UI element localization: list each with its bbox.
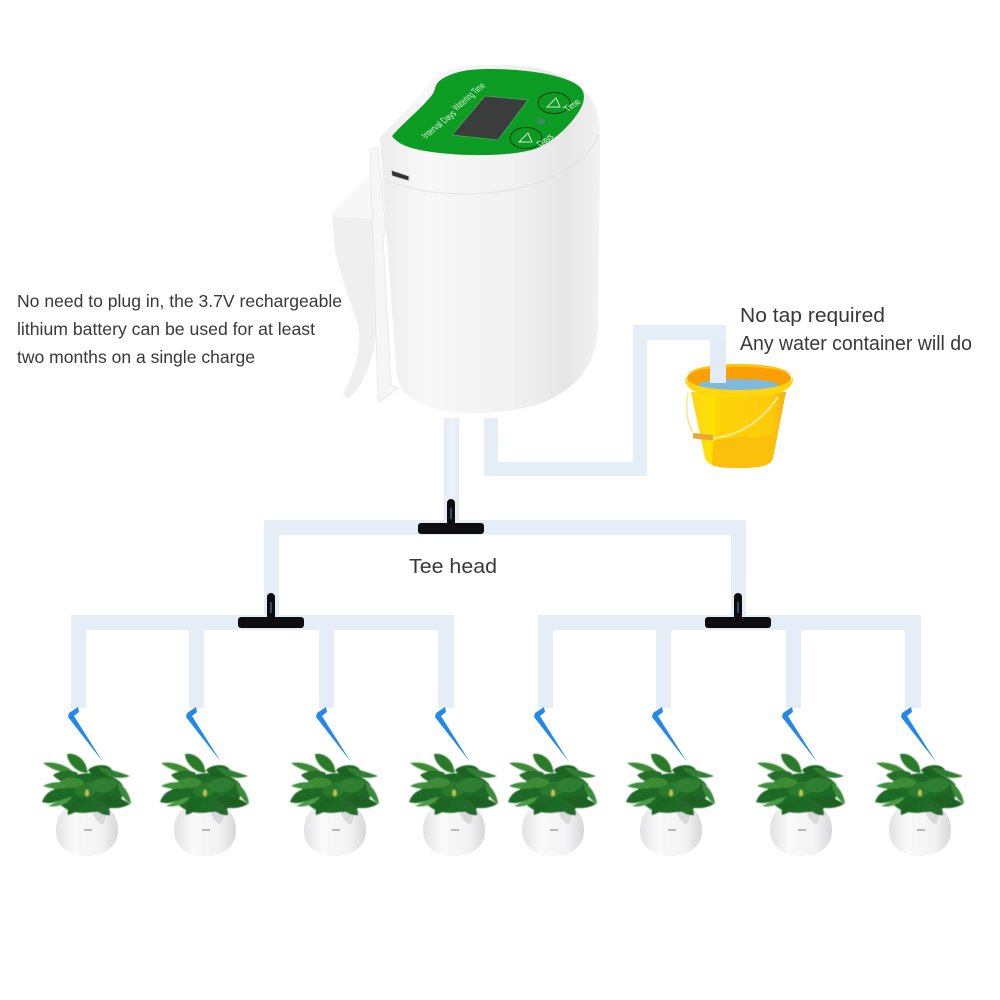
device body bbox=[380, 65, 600, 413]
dripper 1 bbox=[68, 707, 103, 762]
tee connector: main bbox=[418, 499, 484, 534]
potted plant 7 bbox=[756, 754, 845, 856]
tee connector: right bbox=[705, 593, 771, 628]
dripper 7 bbox=[782, 707, 817, 762]
tee connector: left bbox=[238, 593, 304, 628]
panel label: Days: Days bbox=[534, 131, 557, 148]
controller device bbox=[332, 65, 600, 413]
potted plant 1 bbox=[42, 754, 131, 856]
handle clip bbox=[693, 433, 713, 441]
dripper 6 bbox=[652, 707, 687, 762]
panel label: Interval Days: Interval Days bbox=[418, 108, 459, 140]
LCD screen bbox=[452, 96, 528, 140]
caption: battery: two months on a single charge bbox=[17, 347, 255, 367]
dripper 5 bbox=[534, 707, 569, 762]
USB port bbox=[391, 170, 409, 181]
bucket rim bbox=[685, 377, 793, 397]
panel label: Time: Time bbox=[561, 97, 583, 113]
tube: supply line from bucket to controller bbox=[484, 325, 726, 476]
green control panel bbox=[392, 69, 584, 155]
dripper 2 bbox=[186, 707, 221, 762]
potted plant 6 bbox=[626, 754, 715, 856]
caption: battery: No need to plug in, the 3.7V rechargeable bbox=[17, 291, 342, 311]
potted plant 5 bbox=[508, 754, 597, 856]
tube: second level right branch bbox=[538, 615, 921, 708]
days button bbox=[510, 128, 542, 148]
status LED bbox=[537, 118, 545, 124]
bucket body bbox=[691, 392, 786, 468]
dripper 4 bbox=[435, 707, 470, 762]
bucket interior bbox=[687, 365, 791, 391]
tube into bucket bbox=[710, 340, 726, 383]
potted plant 8 bbox=[875, 754, 964, 856]
bucket handle bbox=[687, 393, 778, 438]
bucket bbox=[685, 340, 793, 468]
caption: battery: lithium battery can be used for at least bbox=[17, 319, 315, 339]
potted plant 3 bbox=[290, 754, 379, 856]
tube: first level branch bbox=[264, 520, 746, 616]
bucket lower shade bbox=[712, 433, 778, 468]
caption: water source: Any water container will do bbox=[740, 332, 972, 355]
tube: second level left branch bbox=[71, 615, 454, 708]
water tubing bbox=[71, 325, 921, 708]
dripper 8 bbox=[901, 707, 936, 762]
mounting clip bbox=[332, 147, 398, 402]
dripper 3 bbox=[316, 707, 351, 762]
potted plant 4 bbox=[409, 754, 498, 856]
caption: water source: No tap required bbox=[740, 304, 885, 327]
device lid seam bbox=[386, 135, 599, 194]
water surface bbox=[698, 379, 778, 391]
panel label: Watering Time: Watering Time bbox=[450, 81, 488, 112]
potted plant 2 bbox=[160, 754, 249, 856]
caption: tee head: Tee head bbox=[409, 555, 497, 578]
tube: main line from controller to first tee bbox=[444, 418, 459, 522]
time button bbox=[538, 92, 570, 114]
